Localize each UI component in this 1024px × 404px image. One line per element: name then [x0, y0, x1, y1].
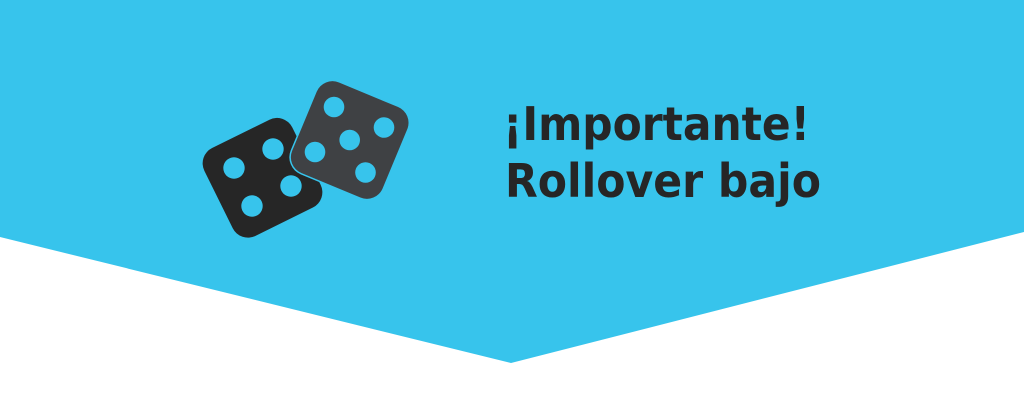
heading — [503, 97, 821, 208]
heading line 2: Rollover bajo — [505, 154, 821, 208]
heading line 1: ¡Importante! — [503, 97, 810, 151]
icon: pair of dice — [197, 76, 414, 243]
icon: dark die showing four — [197, 112, 328, 243]
icon: grey die showing five — [286, 76, 414, 204]
